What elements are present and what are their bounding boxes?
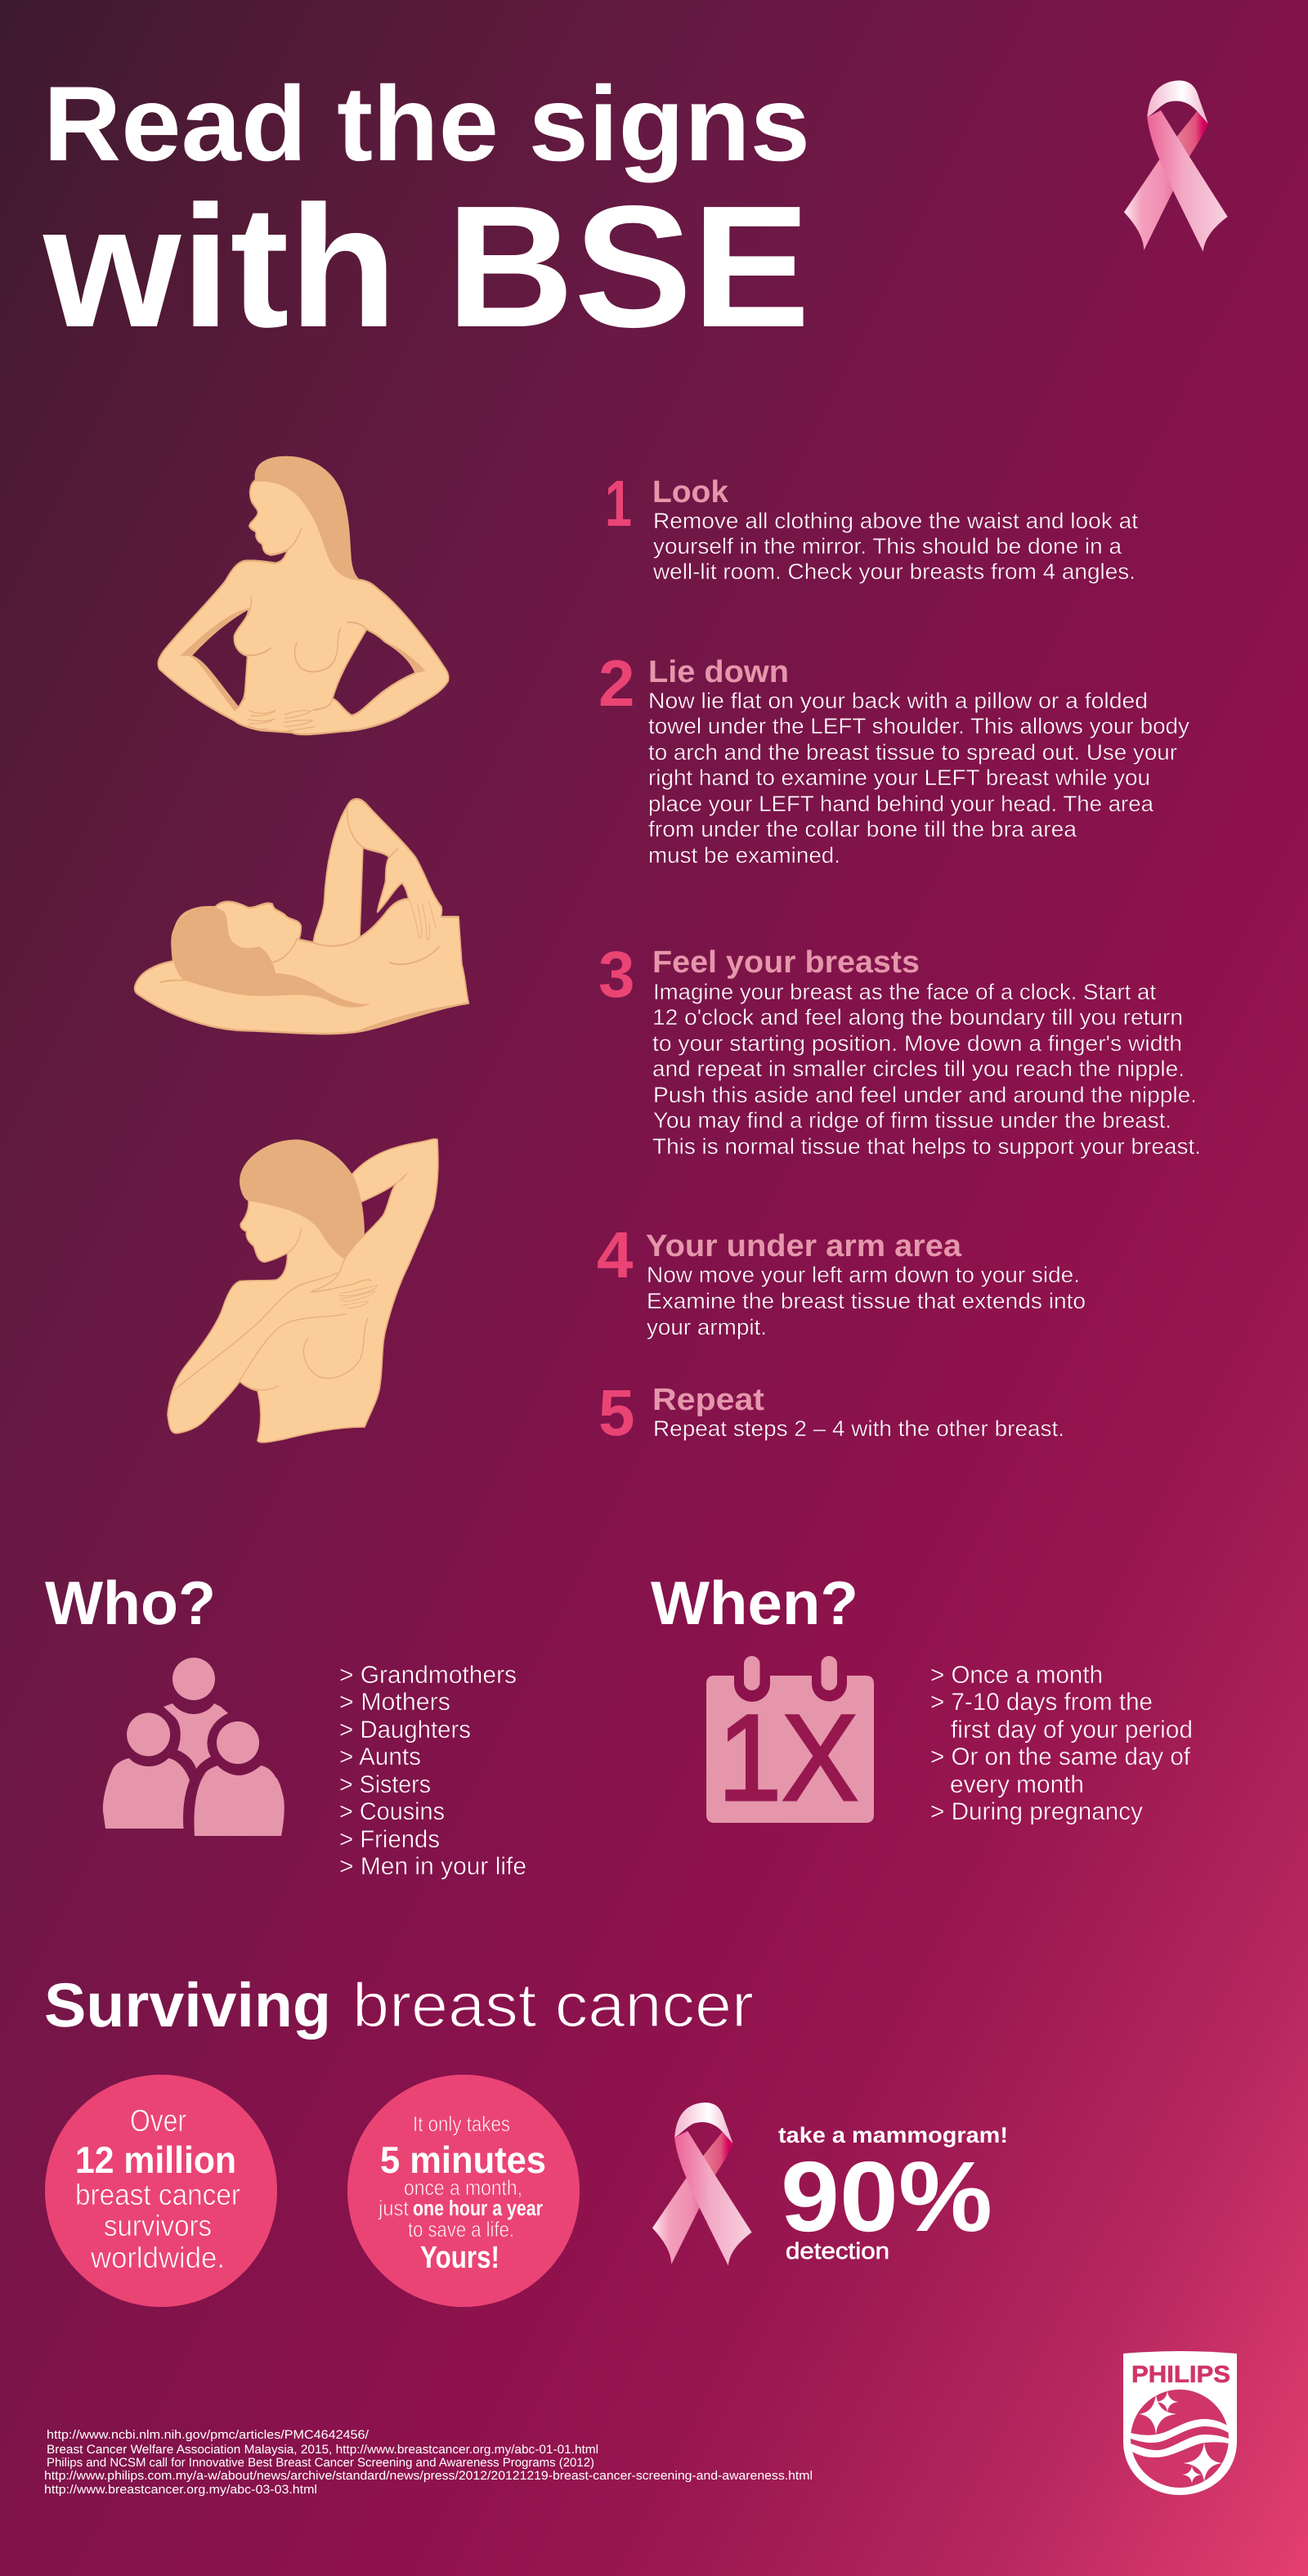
callout: 5 minutes: It only takes (413, 2112, 510, 2136)
text block: look: yourself in the mirror. This should be done in a (653, 534, 1122, 559)
illustration: woman lying down (135, 799, 468, 1034)
sources: Philips and NCSM call for Innovative Best Breast Cancer Screening and Awareness Programs (2012) (47, 2456, 594, 2470)
callout: 5 minutes: just (378, 2196, 410, 2220)
illustration: woman standing with hands on hips (158, 456, 449, 734)
list: who: > Sisters (339, 1771, 431, 1798)
text block: feel your breasts: You may find a ridge of firm tissue under the breast. (653, 1108, 1171, 1133)
heading: feel your breasts: Feel your breasts (652, 945, 920, 980)
list: who: > Grandmothers (339, 1662, 517, 1689)
number 2: 2 (598, 647, 634, 720)
panel: when (651, 1568, 1193, 1826)
text block: feel your breasts: Imagine your breast as the face of a clock. Start at (653, 980, 1157, 1004)
sources (44, 2428, 813, 2497)
callout: 5 minutes: once a month, (404, 2175, 522, 2200)
text block: under arm: Examine the breast tissue that extends into (647, 1289, 1086, 1313)
text block: lie down (648, 689, 1190, 868)
text block: lie down: towel under the LEFT shoulder. This allows your body (648, 714, 1190, 738)
logo: philips shield: PHILIPS (1131, 2362, 1230, 2388)
step 1: look (605, 467, 1139, 584)
text block: look: Remove all clothing above the waist and look at (653, 509, 1139, 533)
callout: 12 million survivors: breast cancer (75, 2178, 240, 2211)
step 4: under arm area (597, 1218, 1086, 1340)
heading: your under arm area: Your under arm area (646, 1229, 962, 1263)
text block: look (652, 509, 1139, 584)
number 1: 1 (605, 467, 632, 540)
list: when: > Or on the same day of (930, 1744, 1191, 1770)
callout: 12 million survivors (45, 2075, 277, 2307)
text block: feel your breasts: This is normal tissue that helps to support your breast. (652, 1134, 1201, 1159)
list: who: > Cousins (339, 1798, 445, 1825)
callout: 5 minutes: to save a life. (408, 2217, 514, 2242)
icon: calendar 1X: 1X (718, 1689, 858, 1826)
callout: 5 minutes: 5 minutes (380, 2138, 546, 2181)
text block: lie down: Now lie flat on your back with a pillow or a folded (648, 689, 1148, 713)
heading: when: When? (651, 1568, 858, 1637)
sources: http://www.philips.com.my/a-w/about/news/archive/standard/news/press/2012/20121219-breast-cancer-screening-and-awareness.html (44, 2469, 813, 2483)
list: who: > Daughters (339, 1717, 471, 1744)
text block: under arm: your armpit. (647, 1315, 767, 1340)
sources: Breast Cancer Welfare Association Malaysia, 2015, http://www.breastcancer.org.my/abc-01-01.html (47, 2443, 598, 2457)
text block: lie down: to arch and the breast tissue to spread out. Use your (648, 740, 1177, 765)
step 3: feel your breasts (598, 938, 1201, 1159)
step 5: repeat (598, 1376, 1064, 1449)
list: when (930, 1662, 1193, 1825)
text block: repeat: Repeat steps 2 – 4 with the other breast. (653, 1416, 1064, 1441)
number 3: 3 (598, 938, 634, 1011)
heading: surviving breast cancer: Surviving (44, 1971, 331, 2040)
heading: look: Look (652, 475, 729, 509)
text block: feel your breasts: and repeat in smaller circles till you reach the nipple. (652, 1057, 1185, 1081)
number 4: 4 (597, 1218, 634, 1291)
callout: 12 million survivors: Over (130, 2104, 186, 2138)
panel: who (45, 1568, 526, 1880)
title: with BSE (43, 169, 810, 363)
text block: lie down: right hand to examine your LEFT breast while you (648, 765, 1150, 790)
callout: 5 minutes: one hour a year (413, 2196, 543, 2220)
text block: lie down: must be examined. (648, 843, 840, 868)
text block: lie down: place your LEFT hand behind your head. The area (648, 792, 1154, 816)
callout: mammogram 90 percent detection: detection (786, 2238, 889, 2264)
icon: pink ribbon lower (652, 2103, 752, 2265)
step 2: lie down (598, 647, 1190, 868)
list: when: > During pregnancy (930, 1798, 1143, 1825)
title: Read the signs (43, 64, 810, 183)
list: who: > Mothers (339, 1689, 450, 1716)
text block: lie down: from under the collar bone till the bra area (648, 817, 1077, 841)
text block: look: well-lit room. Check your breasts from 4 angles. (652, 559, 1136, 584)
sources: http://www.breastcancer.org.my/abc-03-03.html (44, 2483, 317, 2497)
heading: surviving breast cancer: breast cancer (352, 1971, 754, 2040)
list: when: first day of your period (951, 1717, 1193, 1744)
callout: mammogram 90 percent detection: take a mammogram! (778, 2123, 1008, 2147)
icon: pink ribbon top (1124, 80, 1228, 252)
heading: lie down: Lie down (648, 655, 789, 689)
illustration: woman with raised arm checking armpit (168, 1139, 438, 1443)
list: when: > Once a month (930, 1662, 1103, 1689)
text block: feel your breasts: to your starting position. Move down a finger's width (652, 1031, 1182, 1056)
callout: 5 minutes (347, 2075, 580, 2307)
callout: 12 million survivors: worldwide. (90, 2241, 225, 2274)
icon: group of people (103, 1658, 284, 1836)
sources: http://www.ncbi.nlm.nih.gov/pmc/articles/PMC4642456/ (47, 2428, 370, 2442)
heading: who: Who? (45, 1568, 216, 1637)
callout: mammogram 90 percent detection (778, 2123, 1008, 2264)
text block: under arm (647, 1263, 1086, 1340)
list: who (339, 1662, 526, 1880)
list: when: every month (950, 1771, 1084, 1798)
list: who: > Men in your life (339, 1853, 526, 1880)
text block: feel your breasts: 12 o'clock and feel along the boundary till you return (652, 1005, 1183, 1030)
heading: repeat: Repeat (652, 1383, 764, 1417)
list: when: > 7-10 days from the (930, 1689, 1153, 1716)
text block: under arm: Now move your left arm down to your side. (647, 1263, 1080, 1287)
list: who: > Friends (339, 1826, 440, 1853)
callout: 12 million survivors: survivors (104, 2209, 212, 2242)
callout: 5 minutes: Yours! (420, 2241, 499, 2275)
text block: feel your breasts: Push this aside and feel under and around the nipple. (653, 1083, 1197, 1107)
logo: philips shield (1123, 2351, 1237, 2495)
list: who: > Aunts (339, 1744, 421, 1770)
title (43, 64, 810, 363)
callout: mammogram 90 percent detection: 90% (781, 2141, 992, 2252)
text block: feel your breasts (652, 980, 1201, 1159)
callout: 12 million survivors: 12 million (75, 2138, 236, 2181)
number 5: 5 (598, 1376, 634, 1449)
heading: surviving breast cancer (44, 1971, 754, 2040)
